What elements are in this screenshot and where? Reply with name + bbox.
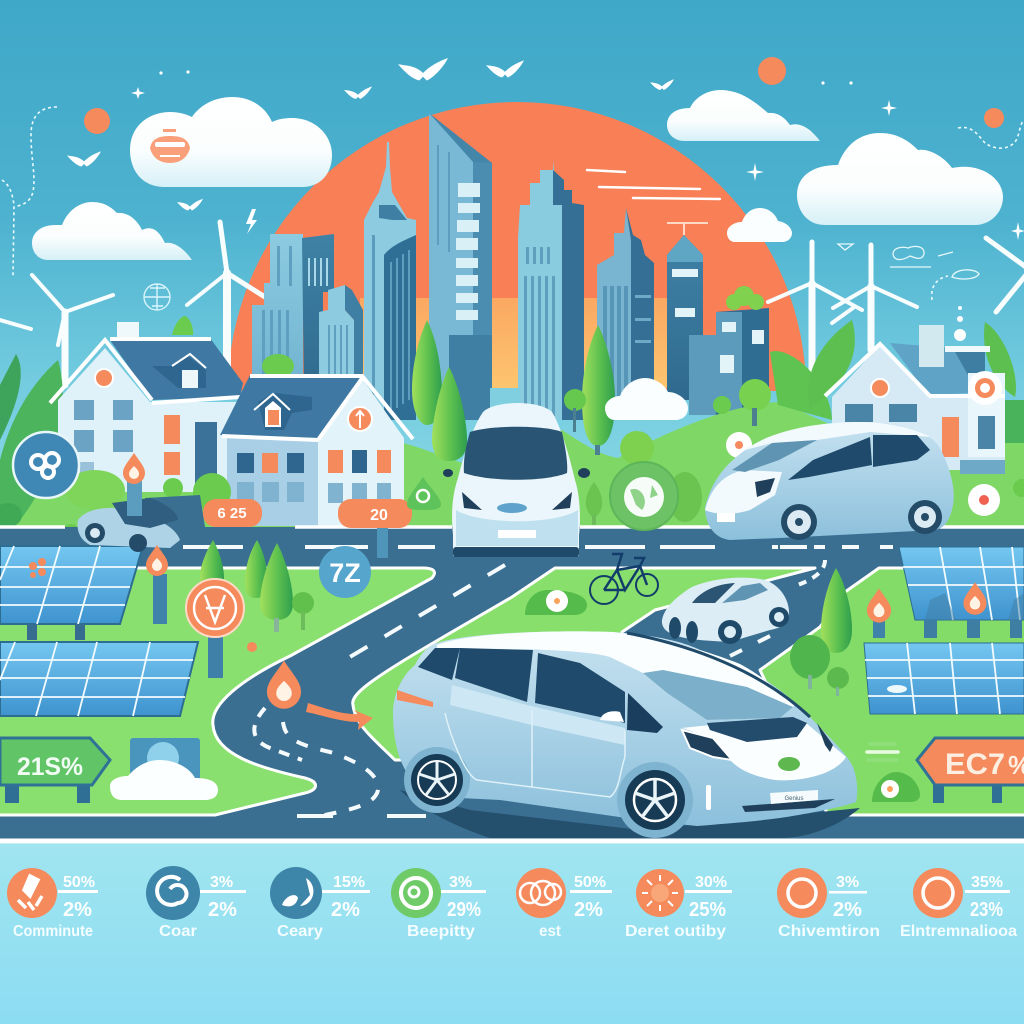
flower <box>726 432 752 458</box>
side headlight <box>817 723 833 752</box>
flame post <box>867 588 891 638</box>
turbine 1 <box>187 222 265 370</box>
window: front quarter <box>627 693 663 733</box>
window: front door <box>535 653 625 723</box>
car: right van <box>705 422 954 540</box>
flowers <box>525 432 1024 802</box>
sign: 20 <box>338 499 412 558</box>
tree tops behind houses <box>172 316 193 335</box>
driveway <box>145 495 205 527</box>
building: low block right <box>689 308 769 415</box>
chimney <box>117 322 139 338</box>
stat: Elntremnaliooa <box>900 868 1017 940</box>
stat: Ceary: 15% <box>333 874 365 891</box>
tree 3 <box>582 325 615 446</box>
tree 1 <box>412 320 442 425</box>
cloud: top right <box>667 90 820 141</box>
sign: EC7 orange <box>917 738 1024 803</box>
stat: Chivemtiron: Chivemtiron <box>778 923 880 940</box>
sign: 625 <box>203 499 262 527</box>
tree 2 <box>432 367 467 461</box>
round tree <box>292 592 314 630</box>
turbine 5 <box>832 245 917 350</box>
sign: 219% green <box>0 738 110 803</box>
stat: est: 50% <box>574 874 606 891</box>
stat: Elntremnaliooa: 23% <box>970 899 1003 921</box>
tree <box>260 543 293 620</box>
flame post <box>146 545 168 624</box>
stats row <box>7 866 1017 940</box>
bush on centre house <box>262 354 294 378</box>
stat: Elntremnaliooa: Elntremnaliooa <box>900 923 1017 940</box>
globe doodle <box>144 284 170 310</box>
bushes behind globe <box>586 472 702 525</box>
badge <box>778 757 800 771</box>
green zones <box>0 568 1024 815</box>
panel: upper right <box>899 547 1024 638</box>
stat: Deret outiby: 25% <box>689 899 726 921</box>
small orange orbs <box>84 57 1004 134</box>
stat: Comminute: 50% <box>63 874 95 891</box>
stat: Deret outiby: Deret outiby <box>625 923 726 940</box>
round tree right <box>739 379 771 426</box>
gable trim <box>50 339 240 403</box>
sign: EC7 orange: EC7 <box>945 748 1005 781</box>
left big leaf <box>0 360 63 530</box>
far right leaf <box>984 322 1016 397</box>
headlight <box>682 730 732 760</box>
main car <box>393 631 860 838</box>
solar panels <box>0 546 1024 716</box>
road white lines <box>0 527 1024 841</box>
orange strip <box>397 690 433 707</box>
wheel: rear <box>404 747 470 813</box>
car body <box>393 631 857 826</box>
cloud: right large <box>797 133 1003 225</box>
panel: upper left <box>0 546 143 640</box>
stat: Ceary: Ceary <box>277 923 323 940</box>
house: left <box>50 322 243 492</box>
sun <box>228 102 806 391</box>
orange road arrow <box>306 703 373 730</box>
panel: lower right <box>864 643 1024 714</box>
stat: Beepitty: 3% <box>449 874 472 891</box>
house: centre <box>220 375 413 526</box>
cloud: small centre right <box>727 208 792 242</box>
lightning icon <box>246 209 257 234</box>
dashed decorative paths <box>2 107 1024 300</box>
car: far left small <box>78 498 180 552</box>
sky background <box>0 0 1024 540</box>
side lamp <box>706 785 711 810</box>
bicycle <box>590 554 658 604</box>
rooftop shrub <box>726 286 764 310</box>
stat: Beepitty: Beepitty <box>407 923 475 940</box>
cloud: left <box>32 202 192 260</box>
plate <box>770 790 818 804</box>
flower on bush <box>525 590 587 615</box>
zone: middle <box>353 568 815 760</box>
building: small block <box>319 285 363 395</box>
turbine 2 <box>32 275 113 385</box>
flower on bush right <box>872 772 920 802</box>
stat: Coar <box>146 866 246 940</box>
sign: 20: 20 <box>370 507 388 524</box>
wheel: front <box>617 762 693 838</box>
small round tree right <box>827 667 849 696</box>
windshield <box>643 670 793 720</box>
roofline <box>627 633 810 717</box>
road surface <box>0 527 1024 840</box>
door lines <box>445 710 625 797</box>
stat: Comminute: Comminute <box>13 923 93 940</box>
roof bar <box>945 346 990 352</box>
cloud icon <box>150 129 190 163</box>
big road flame <box>267 661 301 709</box>
green droplet badge <box>407 477 441 510</box>
roof <box>110 338 243 400</box>
lane dashes <box>183 547 893 816</box>
building: central tower <box>429 113 492 420</box>
stat: Coar: 3% <box>210 874 233 891</box>
stat: Ceary: 2% <box>331 899 360 921</box>
van roof <box>745 422 930 450</box>
green globe sign <box>610 462 678 530</box>
stat: Coar: 2% <box>208 899 237 921</box>
stat: Beepitty <box>391 868 486 940</box>
stat: est <box>516 868 612 940</box>
tree <box>200 540 224 590</box>
round tree right <box>790 635 830 689</box>
sun streak lines <box>587 170 720 199</box>
chimney <box>919 325 944 367</box>
sign: 219% green: 21S% <box>17 753 83 781</box>
plate: Genius <box>784 796 804 802</box>
flower <box>968 484 1000 516</box>
stat: Beepitty: 29% <box>447 899 481 921</box>
sky gap below the sun <box>490 388 520 418</box>
mirror <box>600 711 624 722</box>
right foliage cluster <box>770 351 832 420</box>
building: right stepped <box>597 208 654 420</box>
house: right <box>825 306 1005 474</box>
stat: Chivemtiron: 2% <box>833 899 862 921</box>
weather tile with cloud <box>110 738 218 800</box>
arrow badge <box>348 407 372 431</box>
hood white <box>682 722 846 780</box>
panel: lower left <box>0 642 198 716</box>
bottom panel <box>0 844 1024 1024</box>
stat: Deret outiby <box>625 869 732 940</box>
round tree <box>564 389 586 432</box>
building: stepped tower <box>518 160 584 420</box>
van body <box>705 422 954 540</box>
building: tall spire <box>364 142 416 420</box>
birds <box>67 58 674 210</box>
stat: est: 2% <box>574 899 603 921</box>
turbine 3 off left <box>0 320 31 329</box>
flame post <box>123 453 145 516</box>
far right bush <box>1005 400 1024 443</box>
stacked bush <box>867 744 898 760</box>
turbine 4 <box>768 242 862 370</box>
window: rear door <box>455 648 533 702</box>
round sign: 7Z: 7Z <box>329 558 361 588</box>
bumper <box>742 799 835 812</box>
sign: 625: 6 25 <box>217 505 247 522</box>
foliage left and right <box>0 316 1024 530</box>
light side panel glare <box>450 685 625 745</box>
tree <box>245 540 268 598</box>
window: rear quarter <box>418 648 460 680</box>
flame markers <box>123 453 987 709</box>
city skyline <box>252 113 769 420</box>
zone: lower left <box>0 568 434 815</box>
sparkles and dots <box>131 70 1024 240</box>
tree right <box>821 568 852 653</box>
hills and ground <box>0 402 1024 530</box>
van windshield <box>732 440 817 472</box>
van hood <box>705 470 782 514</box>
right leaf <box>808 320 855 408</box>
car shadow <box>400 790 860 838</box>
turbine 6 off right <box>986 238 1024 312</box>
stat: est: est <box>539 923 562 940</box>
stat: Elntremnaliooa: 35% <box>971 874 1003 891</box>
side wing <box>968 373 1005 457</box>
stat: Chivemtiron: 3% <box>836 874 859 891</box>
wind turbines <box>0 222 1024 385</box>
stat: Comminute <box>7 868 98 940</box>
building: left block <box>252 234 334 400</box>
round sign: leaf icon <box>13 432 79 498</box>
stat: Comminute: 2% <box>63 899 92 921</box>
left fern <box>0 354 21 440</box>
stat: Chivemtiron <box>777 868 880 940</box>
panel badge <box>29 558 46 578</box>
roof white <box>437 631 795 720</box>
stat: Coar: Coar <box>159 923 197 940</box>
gable shadow <box>955 352 985 375</box>
sky line doodles <box>838 244 979 279</box>
white cloud by the trees <box>605 378 688 420</box>
flame on panel <box>963 582 987 615</box>
tall trees centre <box>412 320 771 465</box>
dormer <box>254 393 312 430</box>
small trees <box>200 472 852 696</box>
sun lower glow <box>360 298 680 388</box>
round sign: orange emblem <box>186 579 244 678</box>
car: centre front <box>443 403 590 557</box>
stat: Deret outiby: 30% <box>695 874 727 891</box>
round sign: 7Z <box>319 546 371 598</box>
stat: Ceary <box>270 867 370 940</box>
zone: right <box>760 568 1024 815</box>
dormer <box>152 354 206 388</box>
bushes left <box>0 470 231 544</box>
car: silver mid <box>662 578 789 644</box>
ball marker <box>247 642 257 652</box>
building: dark peak <box>667 223 708 400</box>
cloud: upper left with icon <box>130 97 332 187</box>
smoke bulb <box>954 306 966 341</box>
windshield lower band <box>707 717 807 742</box>
